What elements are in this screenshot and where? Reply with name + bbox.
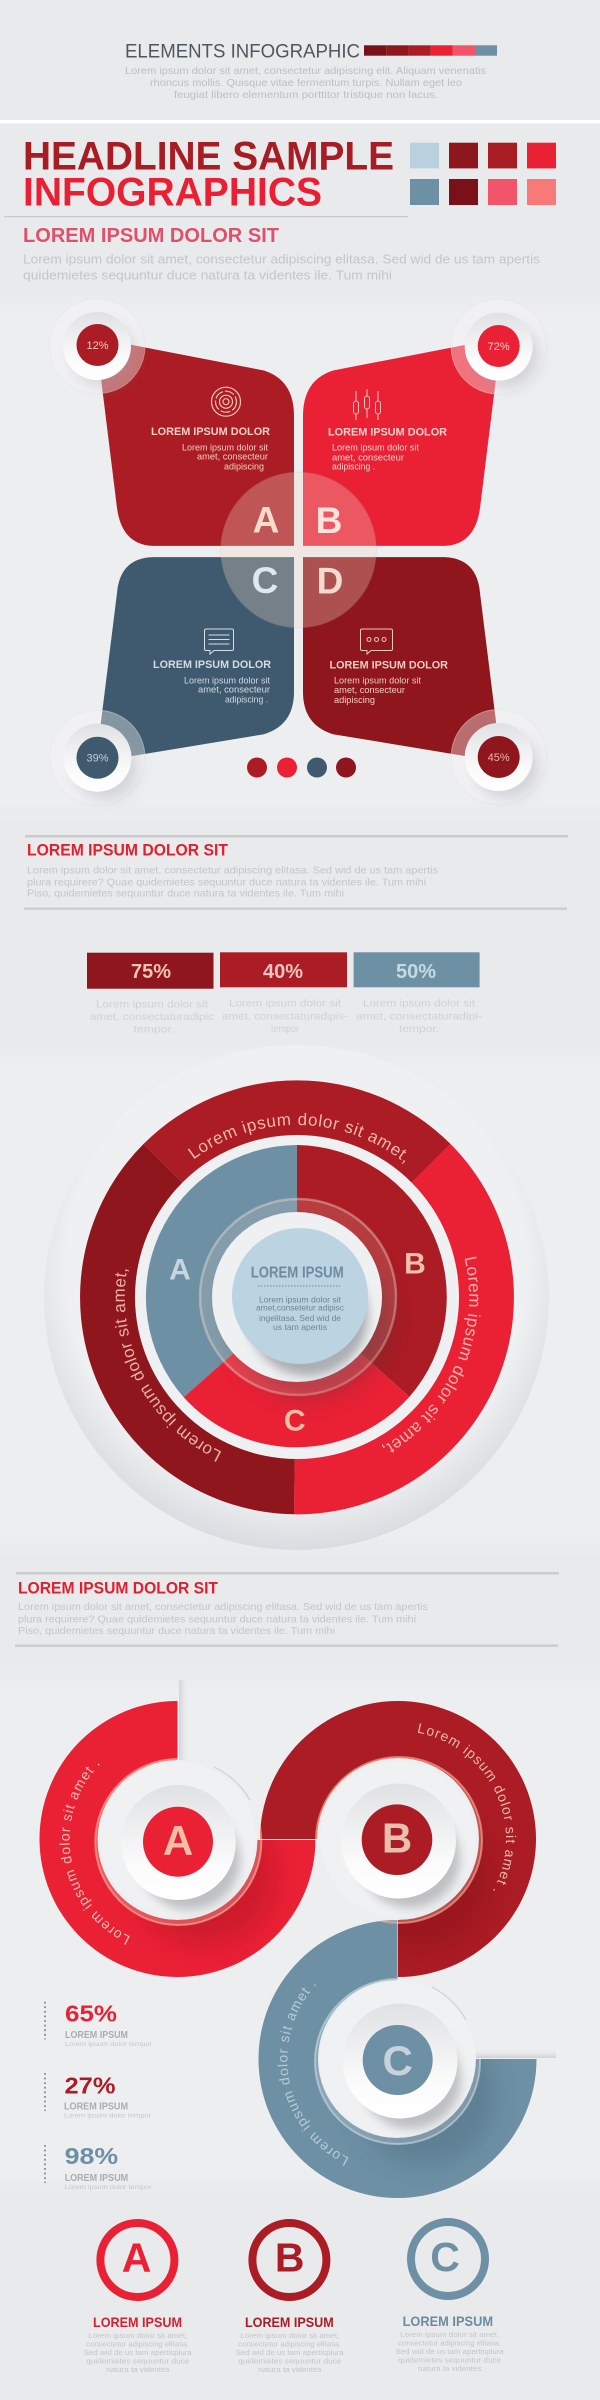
percent badge: 12%: 12% bbox=[86, 340, 109, 352]
main headline: INFOGRAPHICS bbox=[23, 171, 322, 215]
bottom column A: quidemietes sequuntur duce bbox=[86, 2358, 189, 2365]
subheading with intro text: Lorem ipsum dolor sit amet, consectetur adipiscing elitasa. Sed wid de us tam apertis bbox=[23, 251, 541, 266]
swirl: B band: Lorem ipsum dolor sit amet . bbox=[418, 1723, 516, 1891]
swirl knob A bbox=[95, 1759, 261, 1925]
panel C text: amet, consecteur bbox=[198, 684, 270, 696]
bottom column A: A bbox=[122, 2235, 151, 2281]
swirl: A band: Lorem ipsum dolor sit amet . bbox=[60, 1764, 130, 1945]
section heading 2 bbox=[27, 841, 438, 900]
main headline bbox=[23, 134, 394, 215]
stat bar: 50% bbox=[354, 952, 483, 1035]
header body text: feugiat libero elementum porttitor tristique non lacus. bbox=[174, 89, 438, 101]
bottom column B: B bbox=[275, 2235, 305, 2281]
section heading 2: plura requirere? Quae quidemietes sequuntur duce natura ta videntes ile. Tum mihi bbox=[27, 876, 426, 888]
percent badge: 39%: 39% bbox=[86, 753, 109, 765]
header title: ELEMENTS INFOGRAPHIC bbox=[125, 40, 360, 62]
stat bar: 75%: Lorem ipsum dolor sit bbox=[96, 998, 208, 1010]
stat: 27% bbox=[45, 2073, 151, 2120]
panel C text bbox=[153, 659, 271, 705]
section heading 2: Lorem ipsum dolor sit amet, consectetur adipiscing elitasa. Sed wid de us tam apertis bbox=[27, 864, 438, 876]
section heading 2: Piso, quidemietes sequuntur duce natura ta videntes ile. Tum mihi bbox=[27, 888, 344, 900]
main headline: HEADLINE SAMPLE bbox=[23, 134, 394, 178]
panel A text: amet, consecteur bbox=[197, 452, 268, 463]
centre blue disc with text: ingelitasa. Sed wid de bbox=[259, 1314, 342, 1323]
bottom column A: natura ta videntes bbox=[106, 2367, 170, 2374]
section heading 3: Piso, quidemietes sequuntur duce natura ta videntes ile. Tum mihi bbox=[18, 1625, 335, 1637]
panel B text bbox=[328, 427, 447, 472]
bottom column C: LOREM IPSUM bbox=[403, 2313, 493, 2329]
bottom column B: Lorem ipsum dolor sit amet, bbox=[240, 2333, 339, 2340]
swirl knob B bbox=[316, 1757, 482, 1923]
icon: message box bbox=[204, 629, 234, 654]
panel B text: Lorem ipsum dolor sit bbox=[332, 442, 419, 454]
bottom column B: Sed wid de us tam apertisplura bbox=[236, 2350, 344, 2357]
percent badge: 72% bbox=[451, 299, 546, 394]
header body text bbox=[125, 65, 486, 101]
percent badge: 45%: 45% bbox=[488, 752, 510, 764]
icon: sliders bbox=[354, 389, 380, 420]
header: elements infographic bbox=[125, 40, 497, 101]
panel D text: adipiscing bbox=[334, 695, 375, 706]
section heading 3 bbox=[18, 1579, 428, 1637]
panel A text: adipiscing bbox=[224, 461, 264, 472]
subheading with intro text: LOREM IPSUM DOLOR SIT bbox=[23, 225, 279, 247]
centre blue disc with text: amet,consetetur adipisc bbox=[256, 1304, 344, 1313]
centre blue disc with text bbox=[232, 1228, 368, 1364]
panel A text: LOREM IPSUM DOLOR bbox=[151, 426, 270, 438]
glass centre circle with letters: C bbox=[252, 560, 278, 601]
segment letters: B bbox=[404, 1247, 426, 1280]
glass centre circle with letters: D bbox=[317, 560, 343, 602]
segment letters bbox=[169, 1247, 426, 1438]
bottom column A: Sed wid de us tam apertisplura bbox=[84, 2350, 192, 2357]
stat: 27%: Lorem ipsum dolor tempor bbox=[64, 2114, 151, 2120]
subheading with intro text: quidemietes sequuntur duce natura ta videntes ile. Tum mihi bbox=[23, 267, 392, 282]
stat: 65% bbox=[45, 2001, 152, 2048]
panel C text: Lorem ipsum dolor sit bbox=[184, 675, 270, 686]
stat bar: 75%: 75% bbox=[131, 961, 171, 983]
bottom column C: Sed wid de us tam apertisplura bbox=[396, 2349, 504, 2356]
stat: 98% bbox=[45, 2143, 152, 2191]
segment letters: A bbox=[169, 1253, 191, 1286]
centre blue disc with text: LOREM IPSUM bbox=[251, 1264, 344, 1281]
panel C text: LOREM IPSUM DOLOR bbox=[153, 659, 271, 671]
centre blue disc with text: Lorem ipsum dolor sit bbox=[259, 1295, 342, 1304]
bottom column B: consectetur adipiscing elitasa. bbox=[238, 2342, 341, 2349]
stat bar: 40%: Lorem ipsum dolor sit bbox=[229, 998, 341, 1010]
swirl knob C: C bbox=[383, 2037, 413, 2084]
glass centre circle with letters bbox=[220, 472, 376, 628]
percent badge: 72%: 72% bbox=[488, 341, 510, 353]
header body text: Lorem ipsum dolor sit amet, consectetur adipiscing elit. Aliquam venenatis bbox=[125, 65, 486, 77]
swirl knob B: B bbox=[382, 1815, 412, 1862]
panel D text: LOREM IPSUM DOLOR bbox=[330, 660, 448, 672]
swirl knob C bbox=[315, 1979, 480, 2144]
percent badge: 39% bbox=[50, 710, 145, 805]
stat bar: 40%: 40% bbox=[263, 961, 303, 983]
colour swatches bbox=[410, 143, 556, 205]
swirl: B band bbox=[260, 1701, 536, 1977]
panel: A bbox=[101, 344, 294, 546]
stat: 65%: 65% bbox=[65, 2001, 117, 2027]
outer ring segments bbox=[80, 1080, 514, 1514]
stat: 98%: LOREM IPSUM bbox=[65, 2173, 128, 2184]
stat bar: 50%: amet, consectaturadipi- bbox=[356, 1010, 483, 1022]
stat bar: 50%: tempor. bbox=[399, 1023, 439, 1035]
section heading 3: plura requirere? Quae quidemietes sequuntur duce natura ta videntes ile. Tum mihi bbox=[18, 1613, 416, 1625]
stat: 27%: 27% bbox=[64, 2073, 116, 2099]
stat: 65%: LOREM IPSUM bbox=[65, 2030, 128, 2041]
bottom column A: LOREM IPSUM bbox=[93, 2314, 182, 2330]
header body text: rhoncus mollis. Quisque vitae fermentum turpis. Nullam eget leo bbox=[150, 77, 462, 89]
bottom column B: quidemietes sequuntur duce bbox=[238, 2358, 341, 2365]
panel A text bbox=[151, 426, 270, 472]
section heading 2: LOREM IPSUM DOLOR SIT bbox=[27, 841, 228, 859]
bottom column A: consectetur adipiscing elitasa. bbox=[86, 2342, 189, 2349]
white centre disc bbox=[212, 1212, 382, 1382]
bottom column B: natura ta videntes bbox=[258, 2367, 322, 2374]
stat: 98%: Lorem ipsum dolor tempor bbox=[65, 2185, 152, 2191]
stat bar: 50%: Lorem ipsum dolor sit bbox=[363, 998, 475, 1010]
panel: D bbox=[303, 557, 496, 756]
percent badge: 45% bbox=[451, 710, 546, 804]
stat: 65%: Lorem ipsum dolor tempor bbox=[65, 2042, 152, 2048]
stat: 27%: LOREM IPSUM bbox=[64, 2102, 128, 2113]
panel D text bbox=[330, 660, 448, 706]
segment letters: C bbox=[284, 1405, 306, 1438]
bottom column A: Lorem ipsum dolor sit amet, bbox=[88, 2333, 187, 2340]
stat bar: 40% bbox=[220, 952, 349, 1035]
swirl: C band: Lorem ipsum dolor sit amet . bbox=[278, 1984, 348, 2166]
panel D text: Lorem ipsum dolor sit bbox=[334, 675, 421, 686]
ring text right: Lorem ipsum dolor sit amet, bbox=[382, 1256, 480, 1453]
legend dots bbox=[247, 758, 356, 778]
glass centre circle with letters: B bbox=[316, 500, 342, 541]
bottom column C bbox=[396, 2222, 504, 2373]
bottom column C: natura ta videntes bbox=[418, 2366, 482, 2373]
stat bar: 75%: tempor. bbox=[134, 1024, 174, 1036]
chart base plate bbox=[44, 1045, 549, 1550]
shadow strip beside A bbox=[179, 1680, 189, 1760]
stat bar: 75% bbox=[87, 953, 214, 1036]
panel: C bbox=[100, 557, 294, 756]
header colour bar bbox=[364, 45, 497, 56]
centre blue disc with text: us tam apertis bbox=[273, 1323, 327, 1332]
bottom column B bbox=[236, 2223, 344, 2374]
stat bar: 50%: 50% bbox=[396, 961, 436, 983]
stat: 98%: 98% bbox=[65, 2143, 118, 2169]
panel B text: adipiscing . bbox=[332, 461, 375, 472]
circular chart bbox=[44, 1080, 549, 1550]
inner disk segments bbox=[146, 1145, 447, 1447]
icon: target bbox=[212, 387, 240, 416]
icon: chat dots bbox=[360, 629, 392, 654]
panel B text: amet, consecteur bbox=[332, 452, 404, 463]
bottom column C: quidemietes sequuntur duce bbox=[398, 2357, 501, 2364]
subheading with intro text bbox=[23, 225, 541, 282]
translucent ring bbox=[200, 1199, 396, 1395]
panel D text: amet, consecteur bbox=[334, 685, 405, 696]
panel C text: adipiscing . bbox=[225, 694, 268, 705]
panel B text: LOREM IPSUM DOLOR bbox=[328, 427, 447, 439]
percent badge: 12% bbox=[50, 298, 144, 394]
bottom column A bbox=[84, 2223, 192, 2374]
swirl: C band bbox=[258, 1920, 536, 2198]
swirl knob A: A bbox=[163, 1817, 193, 1864]
stat bar: 40%: tempor bbox=[271, 1023, 299, 1035]
ring text top: Lorem ipsum dolor sit amet, bbox=[188, 1112, 406, 1164]
bottom column C: C bbox=[430, 2234, 460, 2280]
stat bar: 40%: amet, consectaturadipis- bbox=[222, 1010, 349, 1022]
ring text left: Lorem ipsum dolor sit amet, bbox=[115, 1270, 222, 1462]
panel A text: Lorem ipsum dolor sit bbox=[182, 442, 268, 454]
section heading 3: LOREM IPSUM DOLOR SIT bbox=[18, 1579, 218, 1597]
stat bar: 75%: amet, consectaturadipic bbox=[90, 1011, 214, 1023]
bottom column B: LOREM IPSUM bbox=[245, 2314, 334, 2330]
glass centre circle with letters: A bbox=[253, 500, 279, 541]
bottom column C: consectetur adipiscing elitasa. bbox=[398, 2341, 501, 2348]
panel: B bbox=[303, 345, 496, 546]
shadow strip beside C bbox=[476, 2048, 556, 2058]
swirl: A band bbox=[40, 1701, 316, 1977]
bottom column C: Lorem ipsum dolor sit amet, bbox=[400, 2332, 499, 2339]
section heading 3: Lorem ipsum dolor sit amet, consectetur adipiscing elitasa. Sed wid de us tam apertis bbox=[18, 1601, 428, 1613]
